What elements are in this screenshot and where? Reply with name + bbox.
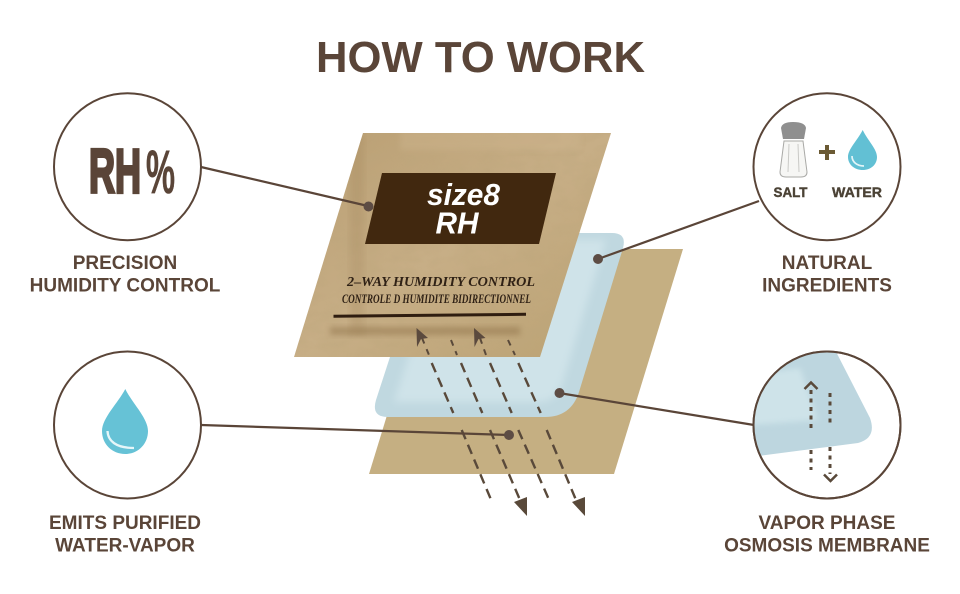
title: HOW TO WORK [316, 33, 645, 82]
panel: emits purified water-vapor [54, 352, 201, 498]
sachet [294, 130, 611, 357]
icon labels: salt and water [774, 184, 882, 200]
blue membrane layer [375, 233, 624, 417]
sachet label box [365, 173, 556, 244]
arrows on sachet [416, 328, 515, 355]
icon: salt shaker [780, 122, 807, 177]
label: precision humidity control [30, 253, 221, 296]
panel: natural ingredients [754, 93, 900, 240]
bottom tan layer [369, 249, 683, 474]
sachet print text: 2–WAY HUMIDITY CONTROL [346, 274, 535, 289]
sachet print text: CONTROLE D HUMIDITE BIDIRECTIONNEL [342, 292, 531, 306]
leader: emits purified water-vapor [201, 425, 514, 440]
dashed arrows leaving bottom layer [462, 430, 585, 516]
icon: water drop [102, 389, 148, 454]
panel: vapor phase osmosis membrane [752, 350, 902, 500]
membrane detail [754, 352, 872, 456]
sachet label box: size8 [427, 177, 501, 212]
icon labels: salt and water: SALT [774, 184, 808, 200]
leader: vapor phase membrane [554, 388, 754, 425]
icon: RH percent: % [146, 138, 175, 206]
label: natural ingredients: INGREDIENTS [762, 276, 892, 296]
label: natural ingredients [762, 253, 892, 296]
label: vapor phase osmosis membrane [724, 513, 930, 556]
sachet label box: RH [436, 206, 479, 240]
label: vapor phase osmosis membrane: VAPOR PHASE [759, 513, 895, 534]
label: emits purified water-vapor: WATER-VAPOR [55, 536, 195, 556]
arrows: vapor exchange [804, 382, 837, 481]
leader: natural ingredients [593, 201, 759, 264]
icon: RH percent: RH [89, 138, 141, 206]
label: precision humidity control: HUMIDITY CONTROL [30, 276, 221, 296]
label: vapor phase osmosis membrane: OSMOSIS MEMBRANE [724, 536, 930, 556]
icon: water drop [848, 130, 877, 170]
label: precision humidity control: PRECISION [73, 253, 177, 274]
dashed arrows through membrane [432, 363, 541, 413]
label: emits purified water-vapor: EMITS PURIFIED [49, 513, 201, 534]
label: emits purified water-vapor [49, 513, 201, 556]
sachet print text [334, 274, 535, 318]
icon: plus [819, 145, 835, 160]
icon labels: salt and water: WATER [832, 184, 882, 200]
leader: precision humidity control [201, 167, 374, 212]
label: natural ingredients: NATURAL [782, 253, 873, 274]
panel: precision humidity control [54, 93, 201, 240]
